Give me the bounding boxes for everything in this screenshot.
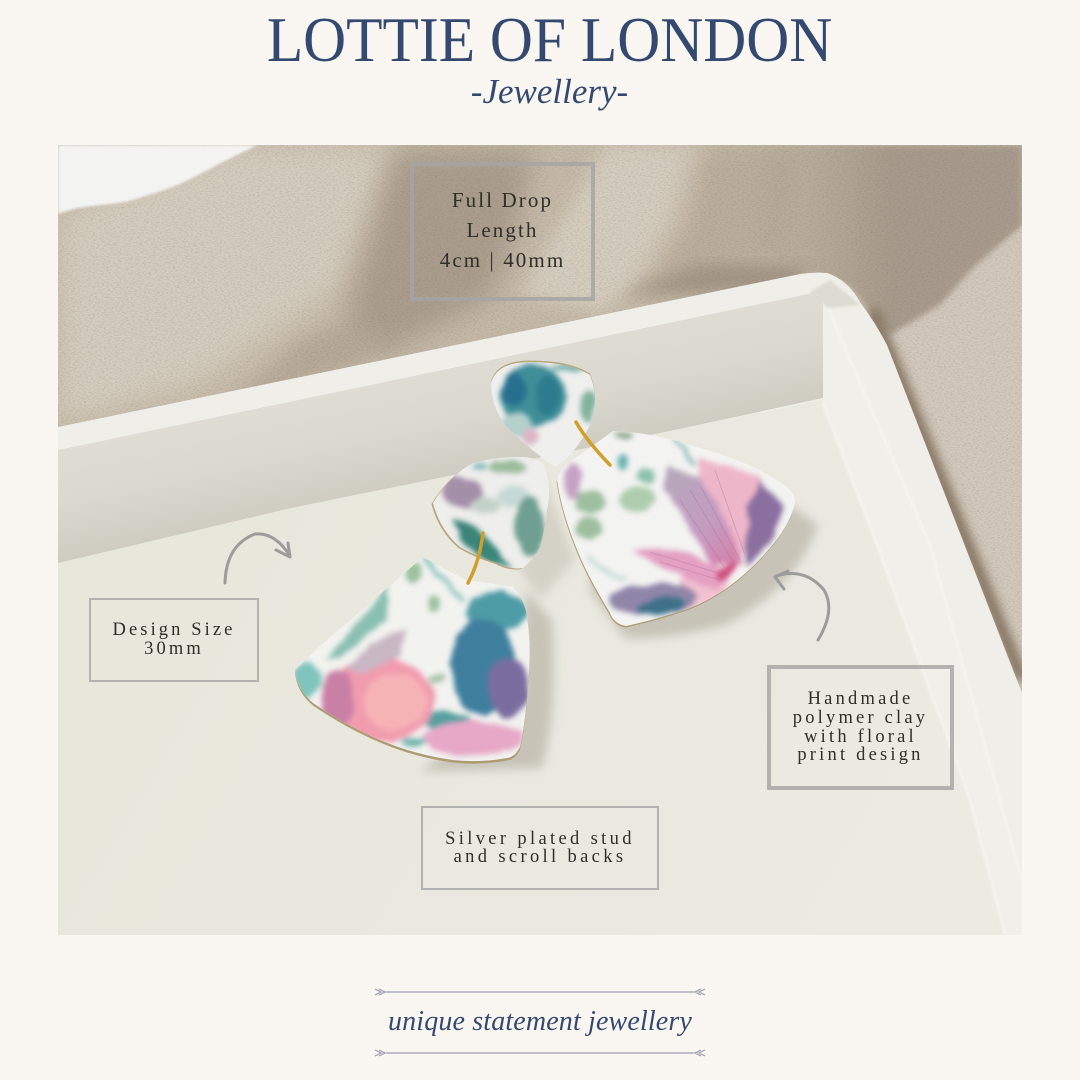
label: silver plated stud [421, 806, 659, 890]
label: full drop length: 4cm | 40mm [440, 248, 565, 272]
jump ring left [468, 533, 483, 583]
earring: drop right [550, 422, 800, 630]
title: LOTTIE OF LONDON [267, 4, 832, 75]
label: handmade polymer clay [767, 665, 954, 790]
label: handmade polymer clay: polymer clay [793, 708, 928, 728]
label: handmade polymer clay: with floral [804, 726, 917, 746]
label: design size: 30mm [144, 639, 204, 659]
label: silver plated stud: and scroll backs [454, 847, 626, 867]
earring shadows [420, 470, 818, 772]
label: handmade polymer clay: Handmade [808, 689, 913, 709]
footer divider bottom [374, 1050, 706, 1056]
earring: top stud left [430, 455, 555, 573]
photo: earrings on a ceramic tray [58, 145, 1022, 935]
label: full drop length: Length [466, 218, 539, 242]
jump ring right [576, 422, 610, 465]
arrow: to design size [225, 534, 290, 583]
tagline: unique statement jewellery [388, 1006, 692, 1037]
earring: top stud right [491, 360, 595, 467]
label: full drop length [410, 162, 595, 301]
earring: drop left [290, 533, 535, 765]
subtitle: -Jewellery- [471, 72, 628, 111]
label: silver plated stud: Silver plated stud [445, 829, 635, 849]
fabric background [58, 145, 1022, 935]
ceramic tray [58, 273, 1022, 935]
label: handmade polymer clay: print design [797, 745, 924, 765]
arrow: to earring print [775, 571, 829, 640]
label: design size [89, 598, 259, 682]
footer divider top [374, 988, 706, 996]
label: design size: Design Size [112, 620, 236, 640]
label: full drop length: Full Drop [452, 188, 553, 212]
